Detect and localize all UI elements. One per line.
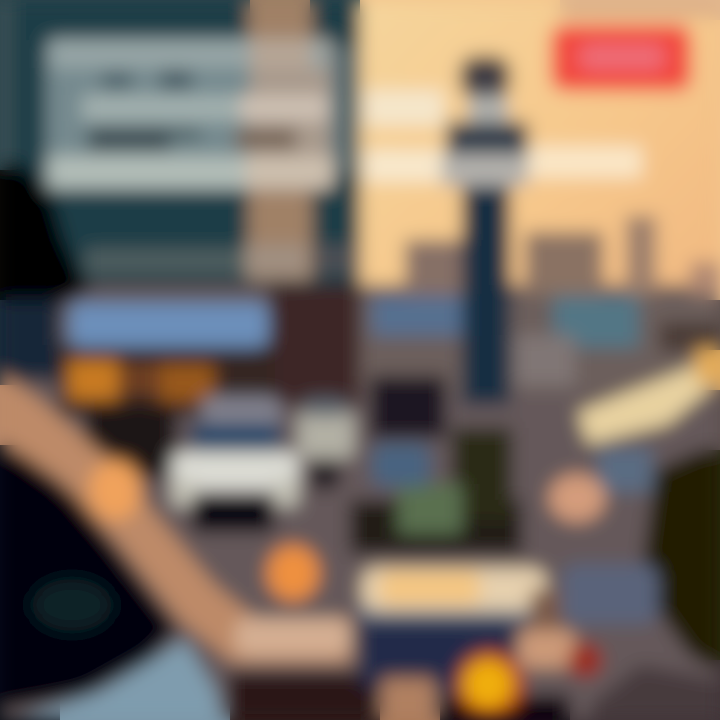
- road surface light patch: [598, 448, 652, 492]
- glow on road: [549, 474, 605, 522]
- yellow headlight: [457, 651, 523, 717]
- tan foreground glow: [382, 678, 434, 720]
- dashboard: grey-blue lower corner: [20, 640, 222, 720]
- dark shadow under car: [440, 695, 570, 720]
- title line three: [48, 156, 333, 188]
- car window frame: orange diagonal: [0, 372, 350, 662]
- street lamp streak: [578, 346, 720, 444]
- foreground car: [360, 568, 602, 720]
- car interior: dark window: [0, 445, 178, 710]
- street trees and mid-ground: [350, 376, 522, 554]
- title text block: [46, 38, 358, 190]
- red tail light: [568, 643, 602, 677]
- subtitle band over sky: [364, 90, 642, 182]
- background: sky: [358, 0, 720, 360]
- red badge: [551, 25, 691, 91]
- white car: [172, 396, 298, 532]
- title line two: [82, 95, 327, 121]
- background: lower street: [0, 285, 720, 720]
- roadside bush: [640, 448, 720, 672]
- car roof highlight: [362, 568, 546, 610]
- background: upper right sky tint: [560, 0, 720, 18]
- central tower: [442, 56, 528, 404]
- storefront: lit orange windows: [68, 360, 214, 402]
- dark spot right of car: [309, 459, 341, 491]
- badge text: [580, 44, 664, 70]
- distant vehicle: [372, 444, 430, 486]
- white van in distance: [298, 398, 354, 458]
- foreground tree silhouette, upper left: [0, 162, 90, 305]
- title line one: [50, 40, 325, 68]
- road lower right: [590, 665, 720, 720]
- brown foreground corner: [228, 672, 378, 720]
- storefront: blue awning: [70, 303, 268, 347]
- skyline: distant buildings: [358, 216, 720, 394]
- orange traffic cone glow: [267, 545, 319, 601]
- light van in road: [562, 564, 658, 624]
- building: teal glass facade: [0, 0, 360, 285]
- storefront: brown building: [0, 285, 360, 477]
